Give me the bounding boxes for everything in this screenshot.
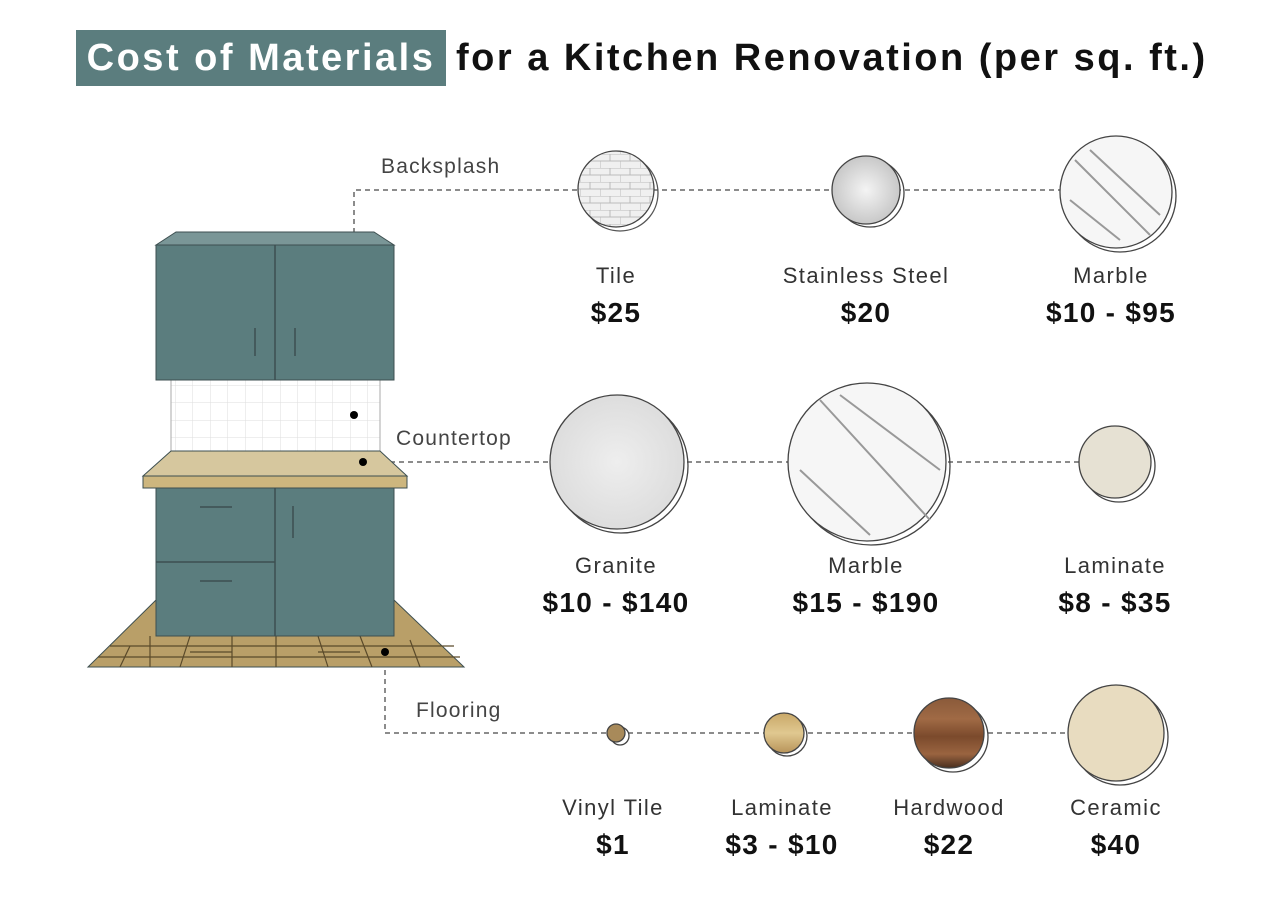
floor	[88, 600, 464, 667]
text: $22	[924, 829, 974, 860]
flooring labels	[562, 795, 664, 860]
title text: for a Kitchen Renovation (per sq. ft.)	[456, 37, 1208, 79]
kitchen cabinet illustration	[88, 232, 464, 667]
countertop labels	[542, 553, 689, 618]
section label: flooring: Flooring	[416, 699, 501, 722]
lower cabinet	[156, 488, 394, 636]
text: Ceramic	[1070, 795, 1162, 820]
text: $20	[841, 297, 891, 328]
laminate floor	[767, 716, 807, 756]
vinyl	[611, 727, 629, 745]
backsplash	[171, 380, 380, 451]
dashed connector lines	[354, 190, 1080, 733]
countertop labels: $10 - $140	[543, 587, 689, 618]
countertop labels: Granite	[575, 553, 657, 578]
text: Hardwood	[893, 795, 1005, 820]
section label: backsplash: Backsplash	[381, 155, 500, 178]
ceramic	[1072, 689, 1168, 785]
backsplash labels	[591, 263, 641, 328]
section label: countertop: Countertop	[396, 427, 512, 450]
text: $3 - $10	[725, 829, 839, 860]
upper cabinet	[156, 232, 394, 245]
title	[76, 30, 1208, 86]
flooring labels: $1	[596, 829, 630, 860]
text: $10 - $95	[1046, 297, 1176, 328]
stainless	[836, 159, 904, 227]
text: $15 - $190	[793, 587, 939, 618]
material circles	[550, 136, 1176, 785]
title highlight box: Cost of Materials	[87, 37, 435, 79]
marble counter	[792, 387, 950, 545]
backsplash labels: $25	[591, 297, 641, 328]
text: $8 - $35	[1058, 587, 1172, 618]
marble backsplash	[1064, 140, 1176, 252]
countertop	[143, 451, 407, 476]
text: $40	[1091, 829, 1141, 860]
tile	[582, 155, 658, 231]
text: Stainless Steel	[783, 263, 949, 288]
text: Laminate	[731, 795, 833, 820]
text: Marble	[828, 553, 904, 578]
laminate counter	[1083, 430, 1155, 502]
anchor dots	[350, 411, 389, 656]
text: Laminate	[1064, 553, 1166, 578]
flooring labels: Vinyl Tile	[562, 795, 664, 820]
granite	[554, 399, 688, 533]
text: Marble	[1073, 263, 1149, 288]
backsplash labels: Tile	[596, 263, 636, 288]
hardwood	[918, 702, 988, 772]
